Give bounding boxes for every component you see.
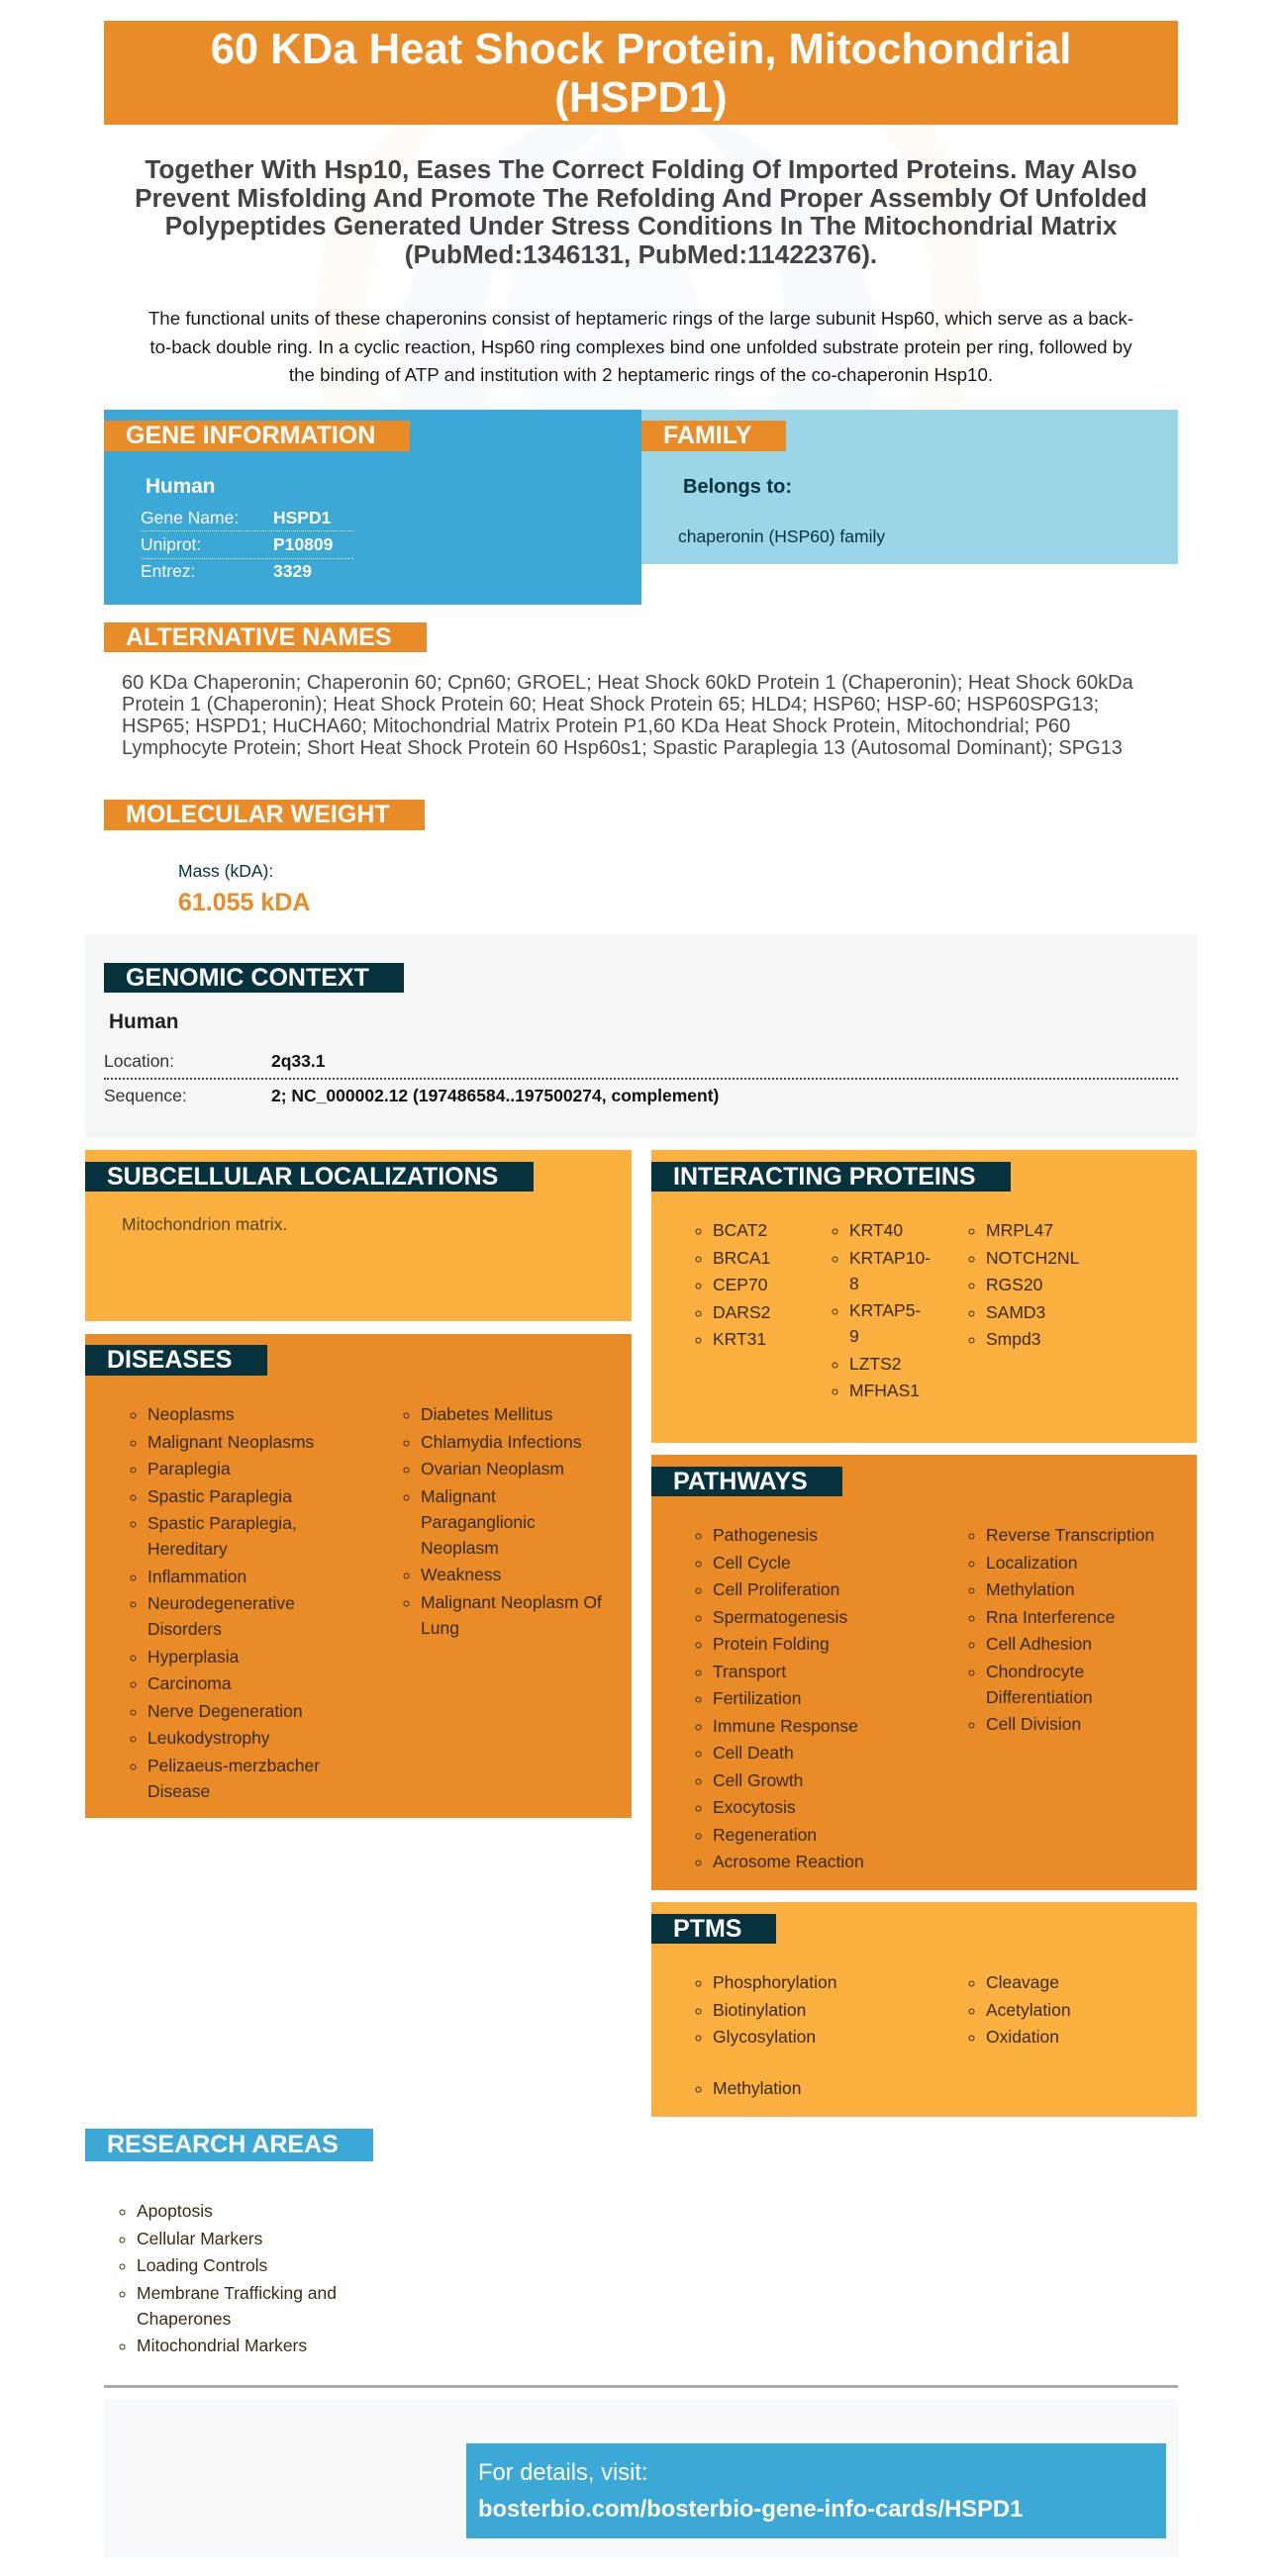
disease list column 2: Ovarian Neoplasm bbox=[421, 1459, 564, 1479]
research areas list: Apoptosis bbox=[137, 2201, 213, 2221]
research areas list bbox=[119, 2201, 337, 2355]
description paragraph: The functional units of these chaperonins consist of heptameric rings of the large subunit Hsp60, which serve as a back- bbox=[148, 308, 1133, 329]
protein list column 2: LZTS2 bbox=[849, 1354, 902, 1374]
disease list column 2: Diabetes Mellitus bbox=[421, 1404, 552, 1424]
panel: interacting proteins bbox=[651, 1150, 1197, 1443]
heading: pathways: PATHWAYS bbox=[673, 1468, 808, 1495]
subtitle heading bbox=[135, 154, 1147, 269]
protein list column 3: NOTCH2NL bbox=[986, 1247, 1079, 1267]
disease list column 1: Carcinoma bbox=[147, 1673, 232, 1693]
alternative names text: 60 KDa Chaperonin; Chaperonin 60; Cpn60; GROEL; Heat Shock 60kD Protein 1 (Chaperonin); Heat Shock 60kDa bbox=[122, 672, 1133, 694]
location row: 2q33.1 bbox=[271, 1051, 325, 1071]
pathway list column 2: Differentiation bbox=[986, 1686, 1093, 1706]
title banner: (HSPD1) bbox=[554, 74, 728, 122]
heading: gene information: GENE INFORMATION bbox=[126, 422, 375, 449]
protein list column 1: BCAT2 bbox=[713, 1220, 767, 1240]
disease list column 2: Malignant bbox=[421, 1486, 496, 1506]
background watermark logo bbox=[277, 125, 990, 410]
disease list column 1: Pelizaeus-merzbacher bbox=[147, 1756, 320, 1775]
ptm list column 2: Oxidation bbox=[986, 2027, 1059, 2047]
pathway list column 2: Chondrocyte bbox=[986, 1661, 1084, 1680]
disease list column 2: Malignant Neoplasm Of bbox=[421, 1591, 602, 1611]
pathway list column 1: Protein Folding bbox=[713, 1634, 830, 1654]
callout: details link: For details, visit: bbox=[478, 2459, 648, 2486]
protein list column 1: BRCA1 bbox=[713, 1247, 770, 1267]
alternative names text: Lymphocyte Protein; Short Heat Shock Protein 60 Hsp60s1; Spastic Paraplegia 13 (Autosomal Dominant); SPG13 bbox=[122, 737, 1123, 759]
ptm list column 1: Methylation bbox=[713, 2078, 802, 2098]
disease list column 2: Paraganglionic bbox=[421, 1512, 536, 1532]
heading: molecular weight: MOLECULAR WEIGHT bbox=[126, 801, 390, 828]
protein list column 2: 9 bbox=[849, 1326, 859, 1346]
protein list column 2: KRTAP5- bbox=[849, 1300, 921, 1320]
protein list column 2: KRTAP10- bbox=[849, 1247, 931, 1267]
heading: pathways bbox=[651, 1467, 842, 1496]
protein list column 3: Smpd3 bbox=[986, 1329, 1040, 1349]
title banner: 60 KDa Heat Shock Protein, Mitochondrial bbox=[211, 26, 1071, 73]
localization text: Mitochondrion matrix. bbox=[122, 1214, 287, 1234]
disease list column 2: Neoplasm bbox=[421, 1538, 499, 1558]
entrez row: Entrez: bbox=[141, 561, 195, 581]
pathway list column 1: Acrosome Reaction bbox=[713, 1852, 864, 1871]
heading: research areas: RESEARCH AREAS bbox=[107, 2131, 339, 2158]
panel: subcellular localizations bbox=[85, 1150, 632, 1321]
belongs to label: Belongs to: bbox=[683, 476, 792, 498]
location row: Location: bbox=[104, 1051, 174, 1071]
pathway list column 1 bbox=[695, 1525, 864, 1871]
pathway list column 1: Spermatogenesis bbox=[713, 1607, 847, 1627]
pathway list column 1: Cell Proliferation bbox=[713, 1579, 839, 1599]
protein list column 3 bbox=[968, 1220, 1079, 1349]
protein list column 3: MRPL47 bbox=[986, 1220, 1053, 1240]
disease list column 1: Disorders bbox=[147, 1619, 222, 1639]
protein list column 2: 8 bbox=[849, 1273, 859, 1292]
research areas list: Membrane Trafficking and bbox=[137, 2282, 337, 2302]
research areas list: Chaperones bbox=[137, 2308, 231, 2328]
disease list column 1: Hereditary bbox=[147, 1539, 228, 1559]
panel: pathways bbox=[651, 1455, 1197, 1890]
disease list column 1: Nerve Degeneration bbox=[147, 1700, 303, 1720]
mass value: 61.055 kDA bbox=[178, 889, 310, 916]
pathway list column 2 bbox=[968, 1525, 1154, 1734]
ptm list column 2: Cleavage bbox=[986, 1972, 1059, 1992]
pathway list column 2: Reverse Transcription bbox=[986, 1525, 1154, 1545]
pathway list column 1: Fertilization bbox=[713, 1688, 801, 1708]
disease list column 1: Spastic Paraplegia, bbox=[147, 1513, 297, 1533]
alternative names text: Protein 1 (Chaperonin); Heat Shock Protein 60; Heat Shock Protein 65; HLD4; HSP60; HSP-60; HSP60SPG13; bbox=[122, 694, 1099, 716]
subtitle heading: (PubMed:1346131, PubMed:11422376). bbox=[405, 239, 877, 269]
disease list column 1: Inflammation bbox=[147, 1566, 246, 1585]
heading: alternative names: ALTERNATIVE NAMES bbox=[126, 623, 392, 651]
ptm list column 1: Biotinylation bbox=[713, 1999, 806, 2019]
protein list column 3: RGS20 bbox=[986, 1275, 1042, 1294]
heading: research areas bbox=[85, 2129, 373, 2161]
heading: family: FAMILY bbox=[663, 422, 751, 449]
sequence row: Sequence: bbox=[104, 1086, 187, 1105]
protein list column 1 bbox=[695, 1220, 770, 1349]
heading: subcellular localizations: SUBCELLULAR LOCALIZATIONS bbox=[107, 1163, 498, 1191]
pathway list column 1: Pathogenesis bbox=[713, 1525, 818, 1545]
protein list column 3: SAMD3 bbox=[986, 1302, 1045, 1322]
ptm list column 2: Acetylation bbox=[986, 1999, 1071, 2019]
uniprot row bbox=[141, 531, 353, 559]
heading: family bbox=[641, 421, 786, 451]
disease list column 1: Paraplegia bbox=[147, 1459, 231, 1479]
pathway list column 2: Cell Division bbox=[986, 1714, 1081, 1734]
disease list column 1: Disease bbox=[147, 1781, 210, 1801]
pathway list column 1: Cell Growth bbox=[713, 1769, 803, 1789]
species label: Human bbox=[146, 475, 215, 498]
subtitle heading: Prevent Misfolding And Promote The Refolding And Proper Assembly Of Unfolded bbox=[135, 183, 1147, 213]
heading: interacting proteins: INTERACTING PROTEINS bbox=[673, 1163, 976, 1191]
disease list column 1: Leukodystrophy bbox=[147, 1728, 270, 1748]
protein list column 1: DARS2 bbox=[713, 1302, 770, 1322]
protein list column 2: KRT40 bbox=[849, 1220, 903, 1240]
ptm list column 1: Phosphorylation bbox=[713, 1972, 837, 1992]
heading: ptms bbox=[651, 1914, 776, 1944]
uniprot row: Uniprot: bbox=[141, 534, 201, 554]
species label: Human bbox=[109, 1010, 178, 1033]
pathway list column 1: Transport bbox=[713, 1661, 786, 1680]
description paragraph: to-back double ring. In a cyclic reaction, Hsp60 ring complexes bind one unfolded substrate protein per ring, followed by bbox=[149, 336, 1132, 357]
gene name row: HSPD1 bbox=[273, 508, 331, 527]
research areas list: Mitochondrial Markers bbox=[137, 2336, 307, 2355]
disease list column 1: Malignant Neoplasms bbox=[147, 1431, 314, 1451]
protein list column 2: MFHAS1 bbox=[849, 1381, 920, 1400]
sequence row: 2; NC_000002.12 (197486584..197500274, complement) bbox=[271, 1086, 719, 1105]
pathway list column 2: Localization bbox=[986, 1552, 1077, 1572]
panel: ptms bbox=[651, 1902, 1197, 2117]
disease list column 2: Weakness bbox=[421, 1565, 501, 1584]
pathway list column 1: Exocytosis bbox=[713, 1797, 796, 1817]
heading: diseases: DISEASES bbox=[107, 1346, 232, 1374]
alternative names text: HSP65; HSPD1; HuCHA60; Mitochondrial Matrix Protein P1,60 KDa Heat Shock Protein, Mitochondrial; P60 bbox=[122, 716, 1070, 737]
disease list column 2 bbox=[404, 1404, 602, 1637]
description paragraph: the binding of ATP and institution with 2 heptameric rings of the co-chaperonin Hsp10. bbox=[289, 364, 993, 385]
protein list column 1: KRT31 bbox=[713, 1329, 766, 1349]
heading: ptms: PTMS bbox=[673, 1915, 741, 1943]
pathway list column 1: Cell Death bbox=[713, 1743, 794, 1763]
disease list column 1: Spastic Paraplegia bbox=[147, 1486, 292, 1506]
gene name row bbox=[141, 505, 353, 531]
entrez row: 3329 bbox=[273, 561, 312, 581]
panel: footer bbox=[104, 2400, 1178, 2557]
ptm list column 1 bbox=[695, 1972, 837, 2098]
disease list column 1: Neurodegenerative bbox=[147, 1593, 295, 1613]
location row bbox=[104, 1048, 1178, 1080]
alternative names text bbox=[122, 672, 1133, 759]
panel: genomic context bbox=[85, 934, 1197, 1138]
research areas list: Cellular Markers bbox=[137, 2229, 262, 2248]
panel: gene information bbox=[104, 410, 641, 605]
panel: family bbox=[641, 410, 1178, 564]
protein list column 2 bbox=[832, 1220, 931, 1400]
disease list column 2: Chlamydia Infections bbox=[421, 1431, 581, 1451]
research areas list: Loading Controls bbox=[137, 2255, 267, 2275]
callout: details link bbox=[466, 2443, 1166, 2538]
pathway list column 2: Rna Interference bbox=[986, 1607, 1115, 1627]
disease list column 1: Neoplasms bbox=[147, 1404, 235, 1424]
mass label: Mass (kDA): bbox=[178, 861, 273, 881]
protein list column 1: CEP70 bbox=[713, 1275, 767, 1294]
ptm list column 2 bbox=[968, 1972, 1071, 2047]
description paragraph bbox=[148, 308, 1133, 385]
disease list column 1 bbox=[131, 1404, 320, 1801]
subtitle heading: Together With Hsp10, Eases The Correct Folding Of Imported Proteins. May Also bbox=[145, 154, 1137, 184]
pathway list column 1: Immune Response bbox=[713, 1716, 858, 1736]
pathway list column 2: Cell Adhesion bbox=[986, 1634, 1092, 1654]
subtitle heading: Polypeptides Generated Under Stress Conditions In The Mitochondrial Matrix bbox=[165, 211, 1117, 240]
disease list column 2: Lung bbox=[421, 1617, 459, 1637]
pathway list column 2: Methylation bbox=[986, 1579, 1075, 1599]
heading: genomic context: GENOMIC CONTEXT bbox=[126, 964, 369, 992]
panel: diseases bbox=[85, 1334, 632, 1818]
pathway list column 1: Cell Cycle bbox=[713, 1552, 791, 1572]
title banner bbox=[104, 21, 1178, 125]
entrez row bbox=[141, 561, 312, 581]
heading: diseases bbox=[85, 1345, 267, 1376]
callout: details link: bosterbio.com/bosterbio-gene-info-cards/HSPD1 bbox=[478, 2496, 1023, 2522]
uniprot row: P10809 bbox=[273, 534, 333, 554]
gene name row: Gene Name: bbox=[141, 508, 239, 527]
family name: chaperonin (HSP60) family bbox=[678, 526, 885, 546]
disease list column 1: Hyperplasia bbox=[147, 1647, 239, 1667]
ptm list column 1: Glycosylation bbox=[713, 2027, 816, 2047]
pathway list column 1: Regeneration bbox=[713, 1825, 817, 1845]
